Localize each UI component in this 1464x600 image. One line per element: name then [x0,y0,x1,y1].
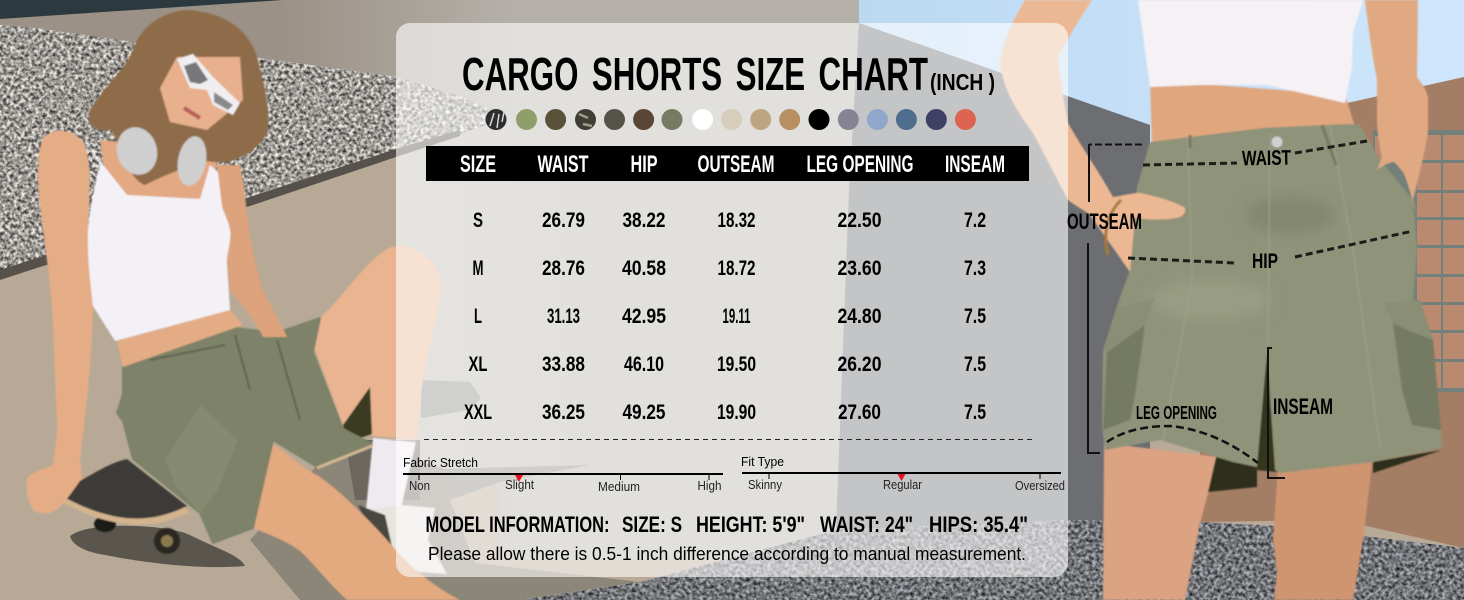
skateboard [52,459,190,554]
table row M: M [472,257,484,280]
left cargo pocket [1103,298,1155,430]
waist line: WAIST [1242,147,1291,170]
table row S: 22.50 [838,209,882,232]
table row XL: 33.88 [542,353,585,376]
table row M: 28.76 [542,257,585,280]
background: sky [859,0,1464,200]
table row S: 26.79 [542,209,585,232]
model information: WAIST: 24" [820,512,913,537]
table row XL: 26.20 [838,353,882,376]
torso [1150,80,1356,145]
shorts [117,318,372,543]
measurement annotations [1067,141,1413,478]
table header [426,146,1029,181]
legs [1103,443,1218,600]
model information: HEIGHT: 5'9" [696,512,805,537]
outseam bracket [1067,144,1142,453]
table row S: 18.32 [718,209,756,232]
table row L: 7.5 [964,305,986,328]
table row S: 38.22 [622,209,666,232]
table row XXL: 19.90 [717,401,756,424]
table row XXL: 7.5 [964,401,986,424]
face [160,57,243,130]
left arm [27,131,93,513]
hair [89,10,268,185]
table row S: 7.2 [964,209,986,232]
table header: LEG OPENING [806,151,914,178]
table row XXL: 36.25 [542,401,585,424]
unit note: (INCH ) [930,69,995,95]
scale: fabric stretch [403,456,723,494]
scale: fabric stretch: Fabric Stretch [403,456,478,470]
waist line [1143,141,1367,170]
inseam bracket [1268,348,1333,478]
panel: translucent size chart card [396,23,1068,577]
table row L [474,305,986,328]
lining [1208,453,1257,492]
model information: SIZE: S [622,512,682,537]
scale: fit type: Regular [883,478,922,492]
midriff [117,310,243,367]
headphones [111,123,210,188]
sock [365,438,416,520]
extended leg [217,442,460,600]
table row L: 31.13 [547,305,580,328]
table header: WAIST [538,151,589,178]
table header: HIP [630,151,658,178]
right arm with hand [1365,0,1428,217]
shoe [358,505,447,574]
chest [100,140,217,210]
hip line [1128,231,1413,273]
model information [426,512,1028,537]
table row XL: 46.10 [624,353,664,376]
table row XXL: XXL [464,401,492,424]
table row L: L [474,305,482,328]
cropped top [1138,0,1363,103]
table header: INSEAM [945,151,1005,178]
table header: OUTSEAM [698,151,774,178]
shorts [1102,124,1442,473]
scale: fabric stretch: Medium [598,480,640,494]
table row L: 19.11 [722,305,751,328]
scale: fit type: Fit Type [741,455,784,469]
colour swatches [486,109,976,130]
model information: HIPS: 35.4" [929,512,1028,537]
figure: seated model [27,10,460,600]
model information: MODEL INFORMATION: [426,512,610,537]
table row S: S [473,209,483,232]
scale: fit type: Skinny [748,478,783,492]
table row M: 7.3 [964,257,986,280]
table row XXL: 49.25 [622,401,666,424]
tank top [80,132,230,341]
table row L: 42.95 [622,305,666,328]
table header: SIZE [460,151,496,178]
table row M: 18.72 [718,257,756,280]
measurement note: Please allow there is 0.5-1 inch difference according to manual measurement. [428,543,1026,564]
table row XXL: 27.60 [838,401,881,424]
sunglasses [177,54,240,115]
inseam bracket: INSEAM [1273,394,1333,419]
table row XL: XL [468,353,488,376]
shorts shading and seams [1150,125,1380,447]
scale: fit type [741,455,1065,493]
table row M: 40.58 [622,257,666,280]
title: CARGO SHORTS SIZE CHART [462,48,928,100]
hip line: HIP [1252,250,1278,273]
table row XL [468,353,986,376]
right arm [217,165,287,337]
scale: fabric stretch: Slight [505,478,534,492]
scale: fit type: Oversized [1015,479,1065,493]
background: left photo scene [0,0,860,600]
raised leg [313,246,441,440]
background: brown building with glass blocks [1200,77,1464,548]
table row S [473,209,986,232]
leg opening line: LEG OPENING [1136,403,1217,423]
bracelet [1106,200,1121,255]
background: gravel foreground [520,520,1464,600]
left arm with hand [1000,0,1185,272]
scale: fabric stretch: Non [409,479,430,493]
leg opening line [1107,403,1258,463]
table row XXL [464,401,986,424]
table row XL: 7.5 [964,353,986,376]
right cargo pocket [1383,300,1441,430]
outseam bracket: OUTSEAM [1067,209,1142,234]
table row M [472,257,986,280]
figure: standing model [1000,0,1442,600]
scale: fabric stretch: High [698,479,722,493]
table row L: 24.80 [838,305,882,328]
table row M: 23.60 [838,257,882,280]
table row XL: 19.50 [717,353,756,376]
background: grey concrete wall [836,23,1150,530]
